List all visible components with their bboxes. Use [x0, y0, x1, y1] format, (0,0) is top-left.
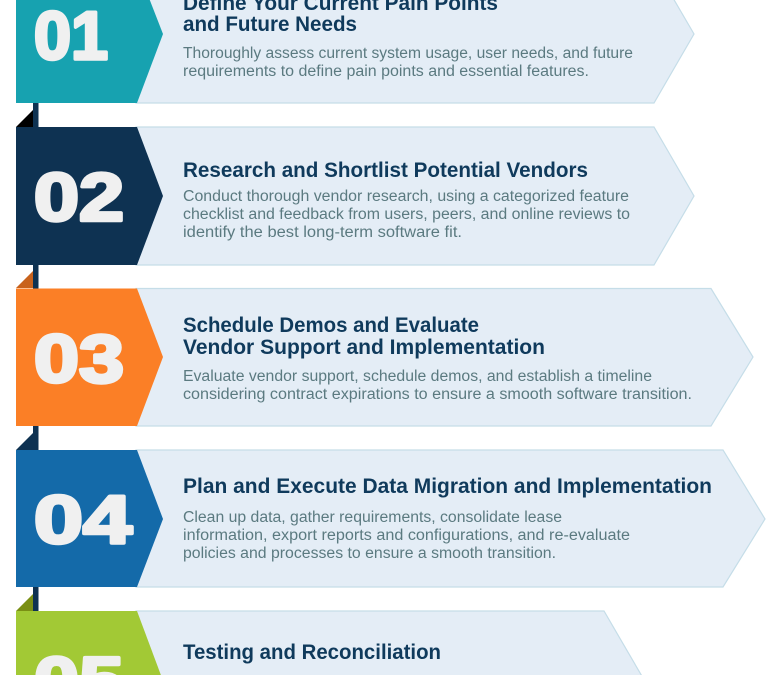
step 3 badge	[16, 288, 163, 426]
connector 4 to 5	[16, 587, 38, 611]
step 5	[16, 611, 643, 675]
connector 2 to 3	[16, 265, 38, 289]
step 1 description: requirements to define pain points and essential features.	[183, 63, 589, 80]
step 2 description: Conduct thorough vendor research, using a categorized feature	[183, 188, 629, 205]
step 4 description: policies and processes to ensure a smooth transition.	[183, 545, 556, 562]
connector 1 to 2	[16, 103, 38, 127]
step 5 panel	[136, 611, 643, 675]
step 5 heading: Testing and Reconciliation	[183, 640, 441, 664]
step 4 panel	[136, 450, 765, 587]
step 1 description: Thoroughly assess current system usage, user needs, and future	[183, 45, 633, 62]
step 4 description: information, export reports and configurations, and re-evaluate	[183, 527, 630, 544]
step 1 badge	[16, 0, 163, 103]
step 2 heading: Research and Shortlist Potential Vendors	[183, 158, 588, 182]
step 2 badge	[16, 127, 163, 265]
step 3 description: considering contract expirations to ensure a smooth software transition.	[183, 386, 692, 403]
step 1 heading: and Future Needs	[183, 12, 357, 36]
connector 3 to 4	[16, 426, 38, 450]
step 5 badge	[16, 611, 162, 675]
step 4	[16, 450, 765, 587]
step 3	[16, 288, 753, 426]
step 4 badge	[16, 450, 163, 587]
step 3 number: 03	[34, 321, 124, 397]
step 2 description: checklist and feedback from users, peers, and online reviews to	[183, 206, 630, 223]
step 3 panel	[136, 288, 753, 426]
step 1	[16, 0, 694, 103]
step 1 number: 01	[34, 0, 108, 74]
step 2 description: identify the best long-term software fit.	[183, 224, 462, 241]
step 2	[16, 127, 694, 265]
step 4 heading: Plan and Execute Data Migration and Implementation	[183, 474, 712, 498]
step 3 heading: Schedule Demos and Evaluate	[183, 313, 479, 337]
step 2 panel	[136, 127, 694, 265]
step 4 number: 04	[34, 482, 132, 558]
step 3 heading: Vendor Support and Implementation	[183, 335, 545, 359]
step 1 panel	[136, 0, 694, 103]
step 4 description: Clean up data, gather requirements, consolidate lease	[183, 509, 562, 526]
step 2 number: 02	[34, 160, 124, 236]
step 3 description: Evaluate vendor support, schedule demos, and establish a timeline	[183, 368, 652, 385]
